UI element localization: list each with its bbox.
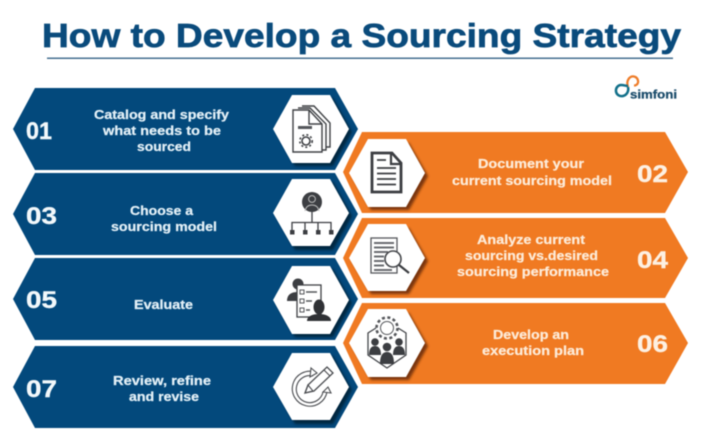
- number: 06: [637, 331, 668, 358]
- white hexagon: [349, 309, 425, 377]
- blue banner: [13, 258, 358, 340]
- icon: document stack with gear: [293, 106, 330, 152]
- panel: step 01: [13, 88, 358, 170]
- step text: Choose a: [130, 204, 194, 218]
- step text: [452, 157, 612, 188]
- step text: [94, 108, 229, 154]
- logo: simfoni: [616, 76, 677, 102]
- blue banner: [13, 173, 358, 255]
- step text: [113, 374, 211, 404]
- orange banner: [343, 303, 688, 384]
- blue banner: [13, 88, 358, 170]
- step text: and revise: [129, 390, 199, 404]
- step text: sourcing vs.desired: [465, 249, 598, 263]
- title underline: [47, 58, 673, 59]
- step text: Catalog and specify: [94, 108, 229, 122]
- icon: revise cycle with pencil: [292, 367, 333, 406]
- step text: sourced: [137, 140, 191, 154]
- step text: sourcing model: [111, 220, 217, 234]
- step text: current sourcing model: [452, 174, 612, 188]
- orange banner: [343, 218, 688, 298]
- step text: what needs to be: [102, 124, 221, 138]
- number: 07: [26, 376, 57, 403]
- number: 03: [26, 203, 57, 230]
- panel: step 04: [343, 218, 688, 298]
- white hexagon: [273, 179, 349, 246]
- step text: [111, 204, 217, 234]
- blue banner: [13, 346, 358, 428]
- logo: simfoni: simfoni: [630, 90, 677, 102]
- number: 05: [26, 287, 57, 314]
- white hexagon: [273, 266, 349, 334]
- panel: step 02: [343, 132, 688, 213]
- step text: [482, 328, 584, 358]
- icon: team with gear: [368, 318, 406, 368]
- panel: step 03: [13, 173, 358, 255]
- step text: [457, 233, 609, 279]
- step text: Document your: [478, 157, 584, 171]
- number: 01: [26, 118, 52, 145]
- number: 04: [637, 247, 668, 274]
- step text: Review, refine: [113, 374, 211, 388]
- step text: Analyze current: [477, 233, 586, 247]
- title: How to Develop a Sourcing Strategy: [42, 18, 681, 55]
- step text: Evaluate: [134, 298, 193, 312]
- white hexagon: [273, 95, 349, 163]
- icon: document with magnifier: [371, 238, 409, 273]
- orange banner: [343, 132, 688, 213]
- step text: execution plan: [482, 344, 584, 358]
- icon: evaluation checklist with people: [287, 278, 331, 321]
- number: 02: [637, 161, 668, 188]
- icon: document: [372, 153, 401, 192]
- panel: step 07: [13, 346, 358, 428]
- panel: step 06: [343, 303, 688, 384]
- icon: org chart: [290, 192, 334, 234]
- panel: step 05: [13, 258, 358, 340]
- white hexagon: [349, 139, 425, 207]
- step text: Develop an: [493, 328, 569, 342]
- white hexagon: [273, 353, 349, 420]
- white hexagon: [349, 224, 425, 291]
- step text: sourcing performance: [457, 265, 609, 279]
